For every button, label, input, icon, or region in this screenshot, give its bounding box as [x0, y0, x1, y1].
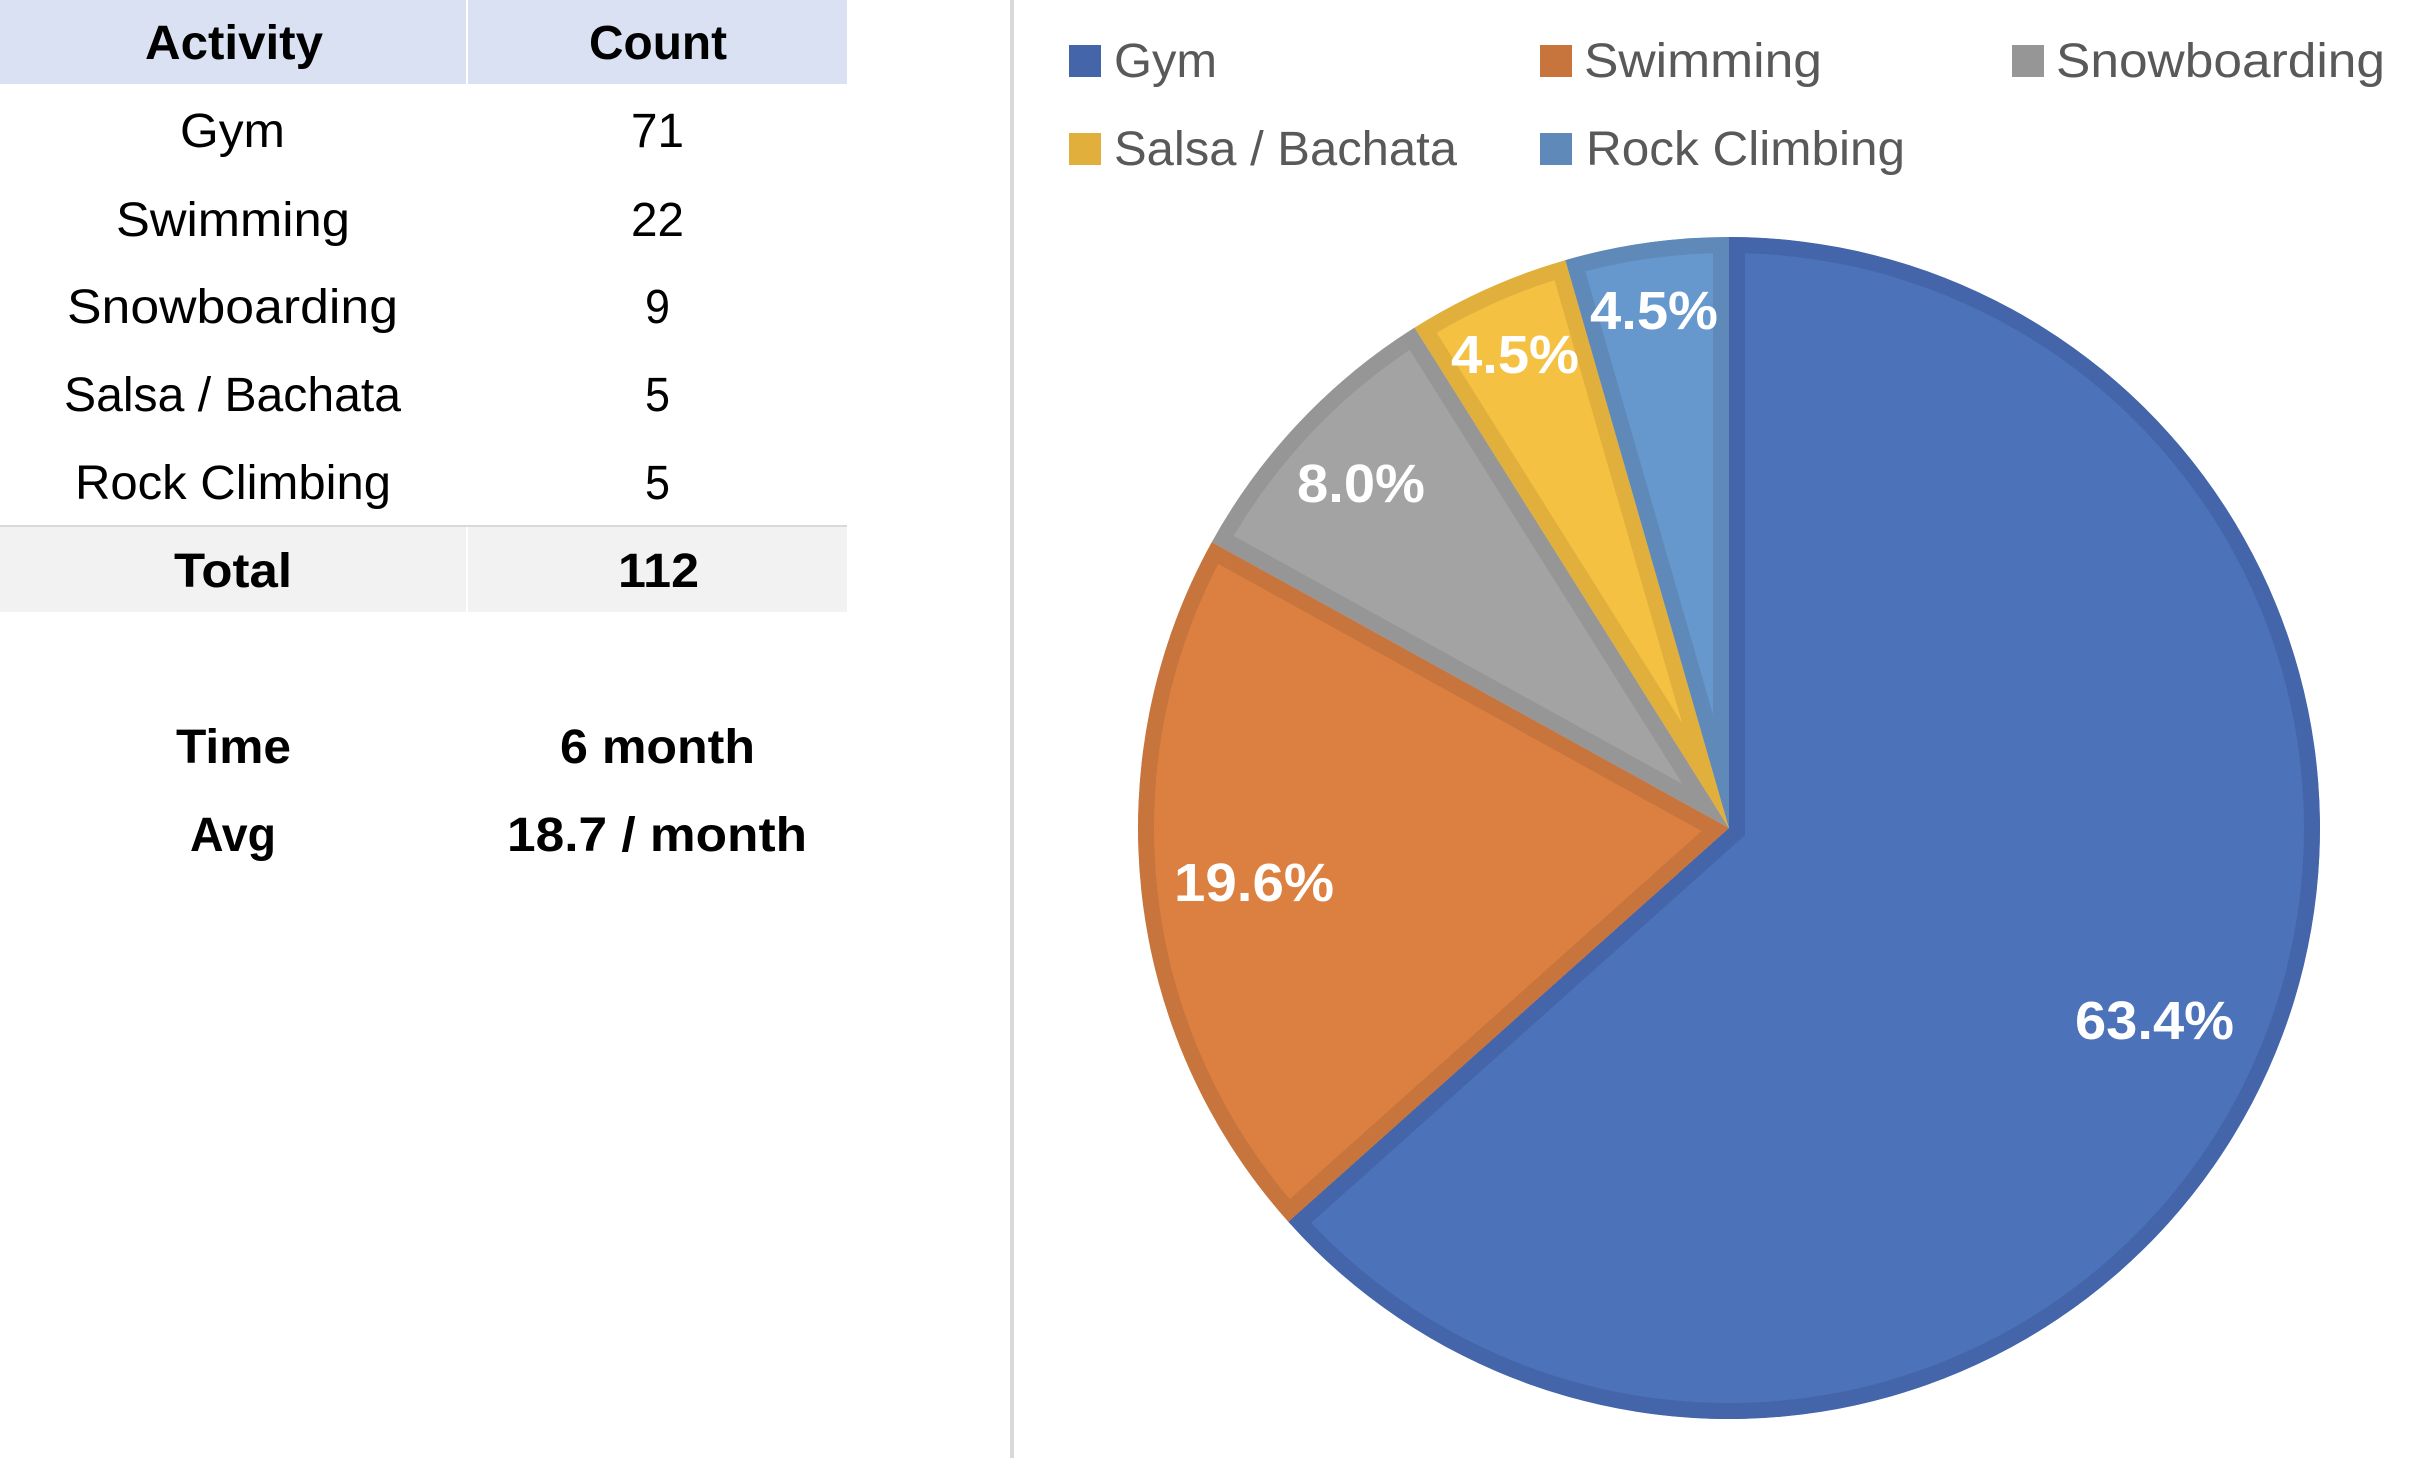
- table header row: Count: [589, 17, 727, 70]
- row: rock climbing: [75, 457, 670, 510]
- row: gym: Gym: [180, 105, 285, 158]
- slice: snowboarding 8.0%: [1212, 328, 1729, 828]
- row: rock climbing: 5: [645, 457, 670, 510]
- data label: rock climbing: 4.5%: [1590, 281, 1718, 341]
- time: [176, 721, 755, 774]
- summary: time and average: [176, 721, 807, 862]
- data label: salsa / bachata: 4.5%: [1451, 325, 1579, 385]
- row: snowboarding: Snowboarding: [67, 281, 398, 334]
- row: total: 112: [618, 545, 699, 598]
- average: [190, 809, 807, 862]
- row: salsa / bachata: 5: [645, 369, 670, 422]
- row: total: Total: [174, 545, 292, 598]
- row: rock climbing: Rock Climbing: [75, 457, 391, 510]
- row: gym: [180, 105, 684, 158]
- row: salsa / bachata: Salsa / Bachata: [64, 369, 401, 422]
- average: 18.7 / month: [507, 809, 807, 862]
- slice: gym 63.4%: [1288, 237, 2320, 1419]
- time: Time: [176, 721, 291, 774]
- data label: gym: 63.4%: [2075, 991, 2234, 1051]
- data label: snowboarding: 8.0%: [1297, 454, 1425, 514]
- row: salsa / bachata: [64, 369, 670, 422]
- pie chart: [1138, 237, 2320, 1419]
- legend: gym: [1069, 35, 1217, 88]
- slice: salsa / bachata 4.5%: [1415, 260, 1729, 828]
- legend: swimming: Swimming: [1584, 35, 1822, 88]
- row: gym: 71: [631, 105, 684, 158]
- table header row: [0, 0, 847, 84]
- row: snowboarding: [67, 281, 670, 334]
- row: snowboarding: 9: [645, 281, 670, 334]
- legend: salsa / bachata: Salsa / Bachata: [1114, 123, 1457, 176]
- row: total: [0, 525, 847, 612]
- data label: swimming: 19.6%: [1174, 853, 1334, 913]
- legend: gym: Gym: [1114, 35, 1217, 88]
- time: 6 month: [560, 721, 755, 774]
- slice: rock climbing 4.5%: [1565, 237, 1729, 828]
- panel: activity table: [0, 0, 847, 612]
- row: swimming: Swimming: [116, 194, 350, 247]
- legend: rock climbing: Rock Climbing: [1586, 123, 1905, 176]
- legend: [1069, 35, 2385, 176]
- legend: snowboarding: Snowboarding: [2056, 35, 2385, 88]
- slice: swimming 19.6%: [1138, 542, 1729, 1222]
- row: swimming: 22: [631, 194, 684, 247]
- average: Avg: [190, 809, 276, 862]
- row: swimming: [116, 194, 684, 247]
- table header row: Activity: [145, 17, 323, 70]
